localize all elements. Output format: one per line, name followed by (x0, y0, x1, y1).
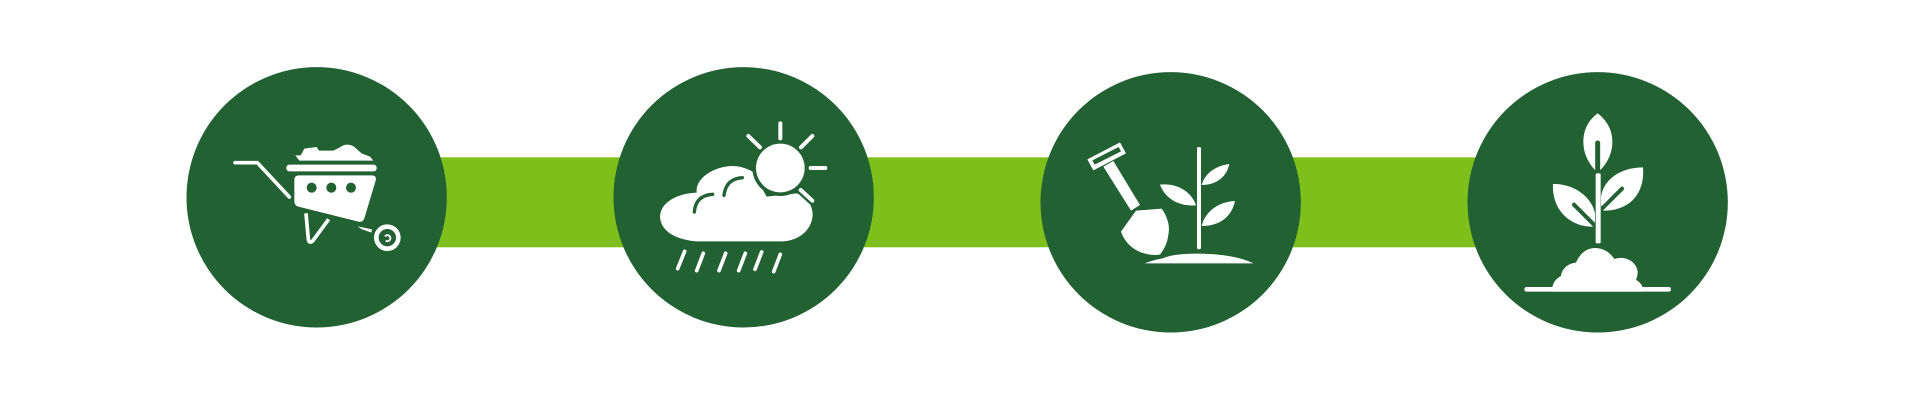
icon: shovel and sapling (1087, 142, 1253, 263)
panel: wheelbarrow (186, 67, 447, 327)
connecting band (400, 157, 1530, 247)
circle background: weather (613, 67, 874, 327)
icon: wheelbarrow (235, 145, 398, 249)
circle background: growth (1467, 72, 1728, 332)
panel: weather (613, 67, 874, 327)
icon: cloud with sun and rain (660, 123, 825, 272)
circle background: planting (1040, 72, 1301, 332)
icon: seedling in soil (1524, 113, 1671, 292)
panel: planting (1040, 72, 1301, 332)
panel: growth (1467, 72, 1728, 332)
circle background: wheelbarrow (186, 67, 447, 327)
